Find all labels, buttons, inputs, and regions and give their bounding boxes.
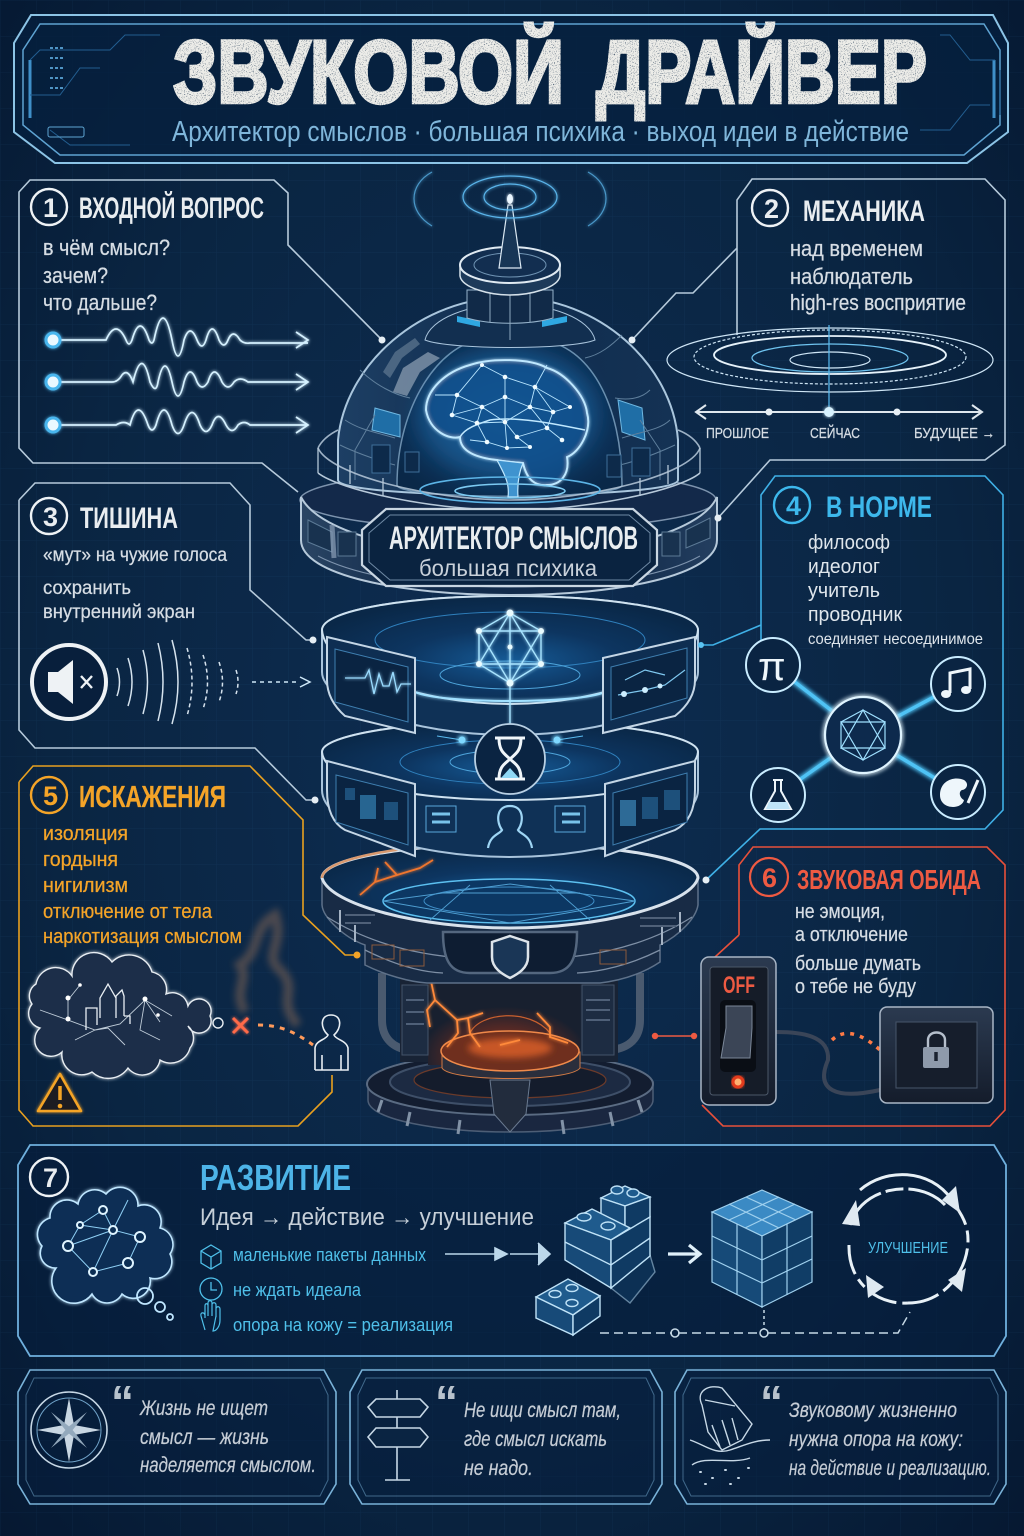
quote card: life and meaning (18, 1370, 336, 1504)
icon: signpost (368, 1390, 428, 1480)
distortions list: гордыня (43, 849, 118, 871)
panel 7: развитие (18, 1145, 1006, 1356)
question list: что дальше? (43, 290, 157, 315)
quote text: нужна опора на кожу: (789, 1428, 963, 1451)
panel 4: в норме (698, 476, 1003, 884)
quote text: Жизнь не ищет (139, 1397, 268, 1420)
quote text: Не ищи смысл там, (464, 1399, 621, 1422)
roles list: учитель (808, 580, 880, 602)
gallery rail (318, 430, 700, 510)
arrow to cube (668, 1245, 700, 1263)
resentment text: а отключение (795, 924, 908, 946)
panel 7 outline (18, 1145, 1006, 1356)
timeline: СЕЙЧАС (810, 424, 860, 442)
icon: pi (746, 638, 800, 692)
heading: ИСКАЖЕНИЯ (79, 779, 226, 814)
distortions list: нигилизм (43, 875, 128, 897)
timeline: БУДУЩЕЕ → (914, 425, 995, 442)
quote text: Звуковому жизненно (789, 1399, 957, 1422)
roles list: философ (808, 532, 890, 554)
number badge (30, 1158, 68, 1196)
main title: ЗВУКОВОЙ (173, 22, 564, 122)
card frame (350, 1370, 662, 1504)
ring two (322, 596, 698, 735)
locked box (880, 1007, 993, 1103)
central plaque (362, 509, 657, 586)
card frame (18, 1370, 336, 1504)
tower base (367, 1053, 653, 1134)
silence text (43, 545, 227, 623)
heading: В НОРМЕ (826, 491, 932, 524)
main title: ДРАЙВЕР (596, 22, 927, 122)
quote mark: “ (760, 1376, 783, 1428)
number badge (31, 189, 67, 225)
bullet: skin support (201, 1301, 453, 1335)
shield icon (492, 936, 528, 978)
main title (173, 22, 927, 122)
distortions list (43, 823, 242, 948)
question list: в чём смысл? (43, 235, 170, 260)
icon: muted speaker (32, 645, 106, 719)
panel 2 outline (632, 179, 1005, 518)
connector dots (628, 336, 722, 522)
quote text (464, 1399, 621, 1480)
quote text: смысл — жизнь (140, 1426, 269, 1449)
bullet: skin support: опора на кожу = реализация (233, 1315, 453, 1335)
number badge (31, 498, 67, 534)
quote card: where to search (350, 1370, 662, 1504)
card frame (675, 1370, 1006, 1504)
mechanics list: high-res восприятие (790, 290, 966, 315)
distortions list: изоляция (43, 823, 128, 845)
cloud network (37, 1187, 173, 1320)
panel 6: звуковая обида (652, 847, 1005, 1126)
person icon (488, 806, 532, 848)
concentric time disc (667, 325, 993, 412)
icon: flask (751, 768, 805, 822)
silence text: сохранить (43, 578, 131, 599)
cable (776, 1032, 880, 1094)
connector dots (310, 636, 318, 804)
icon: person (315, 1015, 348, 1070)
plaque subtitle: большая психика (419, 555, 597, 581)
quote text (789, 1399, 991, 1480)
signal waves above antenna (414, 172, 606, 226)
ring two right screen (603, 637, 695, 733)
number badge: 2 (764, 194, 779, 224)
quote text: где смысл искать (464, 1428, 607, 1451)
red connector (652, 1033, 697, 1039)
timeline (696, 405, 995, 442)
assembled cube (712, 1190, 812, 1307)
formula: Идея → действие → улучшение (200, 1204, 534, 1231)
mechanics list: над временем (790, 236, 923, 261)
icon: music note (931, 657, 985, 711)
timeline: ПРОШЛОЕ (706, 425, 769, 442)
signal waves (46, 318, 308, 434)
bullet: data packets: маленькие пакеты данных (233, 1245, 426, 1265)
quote text (139, 1397, 316, 1477)
resentment text: не эмоция, (795, 901, 885, 923)
number badge: 7 (43, 1163, 58, 1193)
number badge (31, 777, 67, 813)
ring four with skirt (322, 844, 698, 983)
quote text: не надо. (464, 1457, 533, 1480)
dashed link (258, 1025, 313, 1045)
heading: МЕХАНИКА (803, 195, 925, 228)
improvement cycle: УЛУЧШЕНИЕ (868, 1240, 948, 1257)
top collar and antenna dish (425, 194, 595, 348)
connector dot (378, 336, 386, 344)
building blocks (536, 1186, 655, 1335)
quote card: skin support (675, 1370, 1006, 1504)
network hexagon icon (476, 610, 544, 735)
icon: compass (31, 1392, 107, 1468)
panel 3: тишина (19, 483, 318, 804)
icon: palette (931, 765, 985, 819)
roles list: проводник (808, 604, 902, 626)
resentment text (795, 901, 921, 998)
hub diagram (746, 638, 985, 822)
number badge: 4 (786, 491, 801, 521)
quote text: наделяется смыслом. (140, 1454, 316, 1477)
panel 1 outline (19, 180, 381, 492)
distortions list: отключение от тела (43, 901, 213, 923)
icon: warning triangle (38, 1074, 81, 1111)
question list (43, 235, 170, 315)
cross mark (233, 1018, 248, 1033)
number badge: 1 (43, 193, 58, 223)
overheated core (382, 967, 640, 1078)
central tower illustration (300, 172, 717, 1134)
roles list: соединяет несоединимое (808, 631, 983, 648)
panel 5 outline (19, 766, 357, 1126)
bullet: do not wait: не ждать идеала (233, 1280, 362, 1300)
subtitle: Архитектор смыслов · большая психика · выход идеи в действие (172, 116, 909, 148)
question list: зачем? (43, 263, 108, 288)
quote mark: “ (435, 1376, 458, 1428)
heading: ВХОДНОЙ ВОПРОС (79, 191, 264, 225)
resentment text: больше думать (795, 953, 921, 975)
resentment text: о тебе не буду (795, 976, 916, 998)
heading: ТИШИНА (80, 502, 178, 535)
quote mark: “ (111, 1376, 134, 1428)
ring three left screen (327, 761, 415, 856)
number badge: 6 (762, 863, 777, 893)
number badge: 5 (43, 781, 58, 811)
broken link (832, 1033, 880, 1050)
icon: padlock (923, 1032, 949, 1068)
bullet: data packets (201, 1245, 426, 1269)
bullet: do not wait (200, 1278, 362, 1300)
header panel (14, 15, 1008, 163)
heading: РАЗВИТИЕ (200, 1157, 351, 1198)
improvement cycle (842, 1175, 968, 1303)
dome (300, 297, 716, 530)
main ring band (301, 497, 717, 595)
panel 2: механика (628, 179, 1005, 522)
smoke (240, 915, 298, 1025)
ring three right screen (605, 761, 695, 856)
mechanics list: наблюдатель (790, 264, 913, 289)
connector dots (698, 642, 704, 648)
fading sound waves (117, 640, 310, 724)
thought cloud with castle (29, 953, 223, 1078)
silence text: «мут» на чужие голоса (43, 545, 227, 566)
panel 5: искажения (19, 766, 360, 1126)
number badge: 3 (43, 502, 58, 532)
roles list: идеолог (808, 556, 880, 578)
panel 4 outline (701, 476, 1003, 880)
panel 1: входной вопрос (19, 180, 386, 492)
number badge (752, 190, 788, 226)
roles list (808, 532, 983, 648)
silence text: внутренний экран (43, 602, 195, 623)
brain (426, 360, 588, 497)
number badge (750, 858, 788, 896)
plaque title: АРХИТЕКТОР СМЫСЛОВ (389, 520, 638, 556)
hourglass icon (437, 724, 583, 794)
panel 6 outline (702, 847, 1005, 1126)
connector dot (354, 952, 360, 958)
ring three (322, 721, 698, 857)
flow arrow to blocks (445, 1243, 550, 1265)
off switch (701, 957, 776, 1105)
icon: pi: π (758, 645, 786, 689)
feedback loop dashed line (600, 1310, 910, 1337)
icon: hand on sand (690, 1387, 770, 1484)
distortions list: наркотизация смыслом (43, 926, 242, 948)
number badge (774, 487, 810, 523)
ring two left screen (327, 637, 415, 733)
header frame (14, 15, 1008, 163)
mechanics list (790, 236, 966, 315)
panel 3 outline (19, 483, 315, 800)
off switch: OFF (723, 972, 755, 999)
